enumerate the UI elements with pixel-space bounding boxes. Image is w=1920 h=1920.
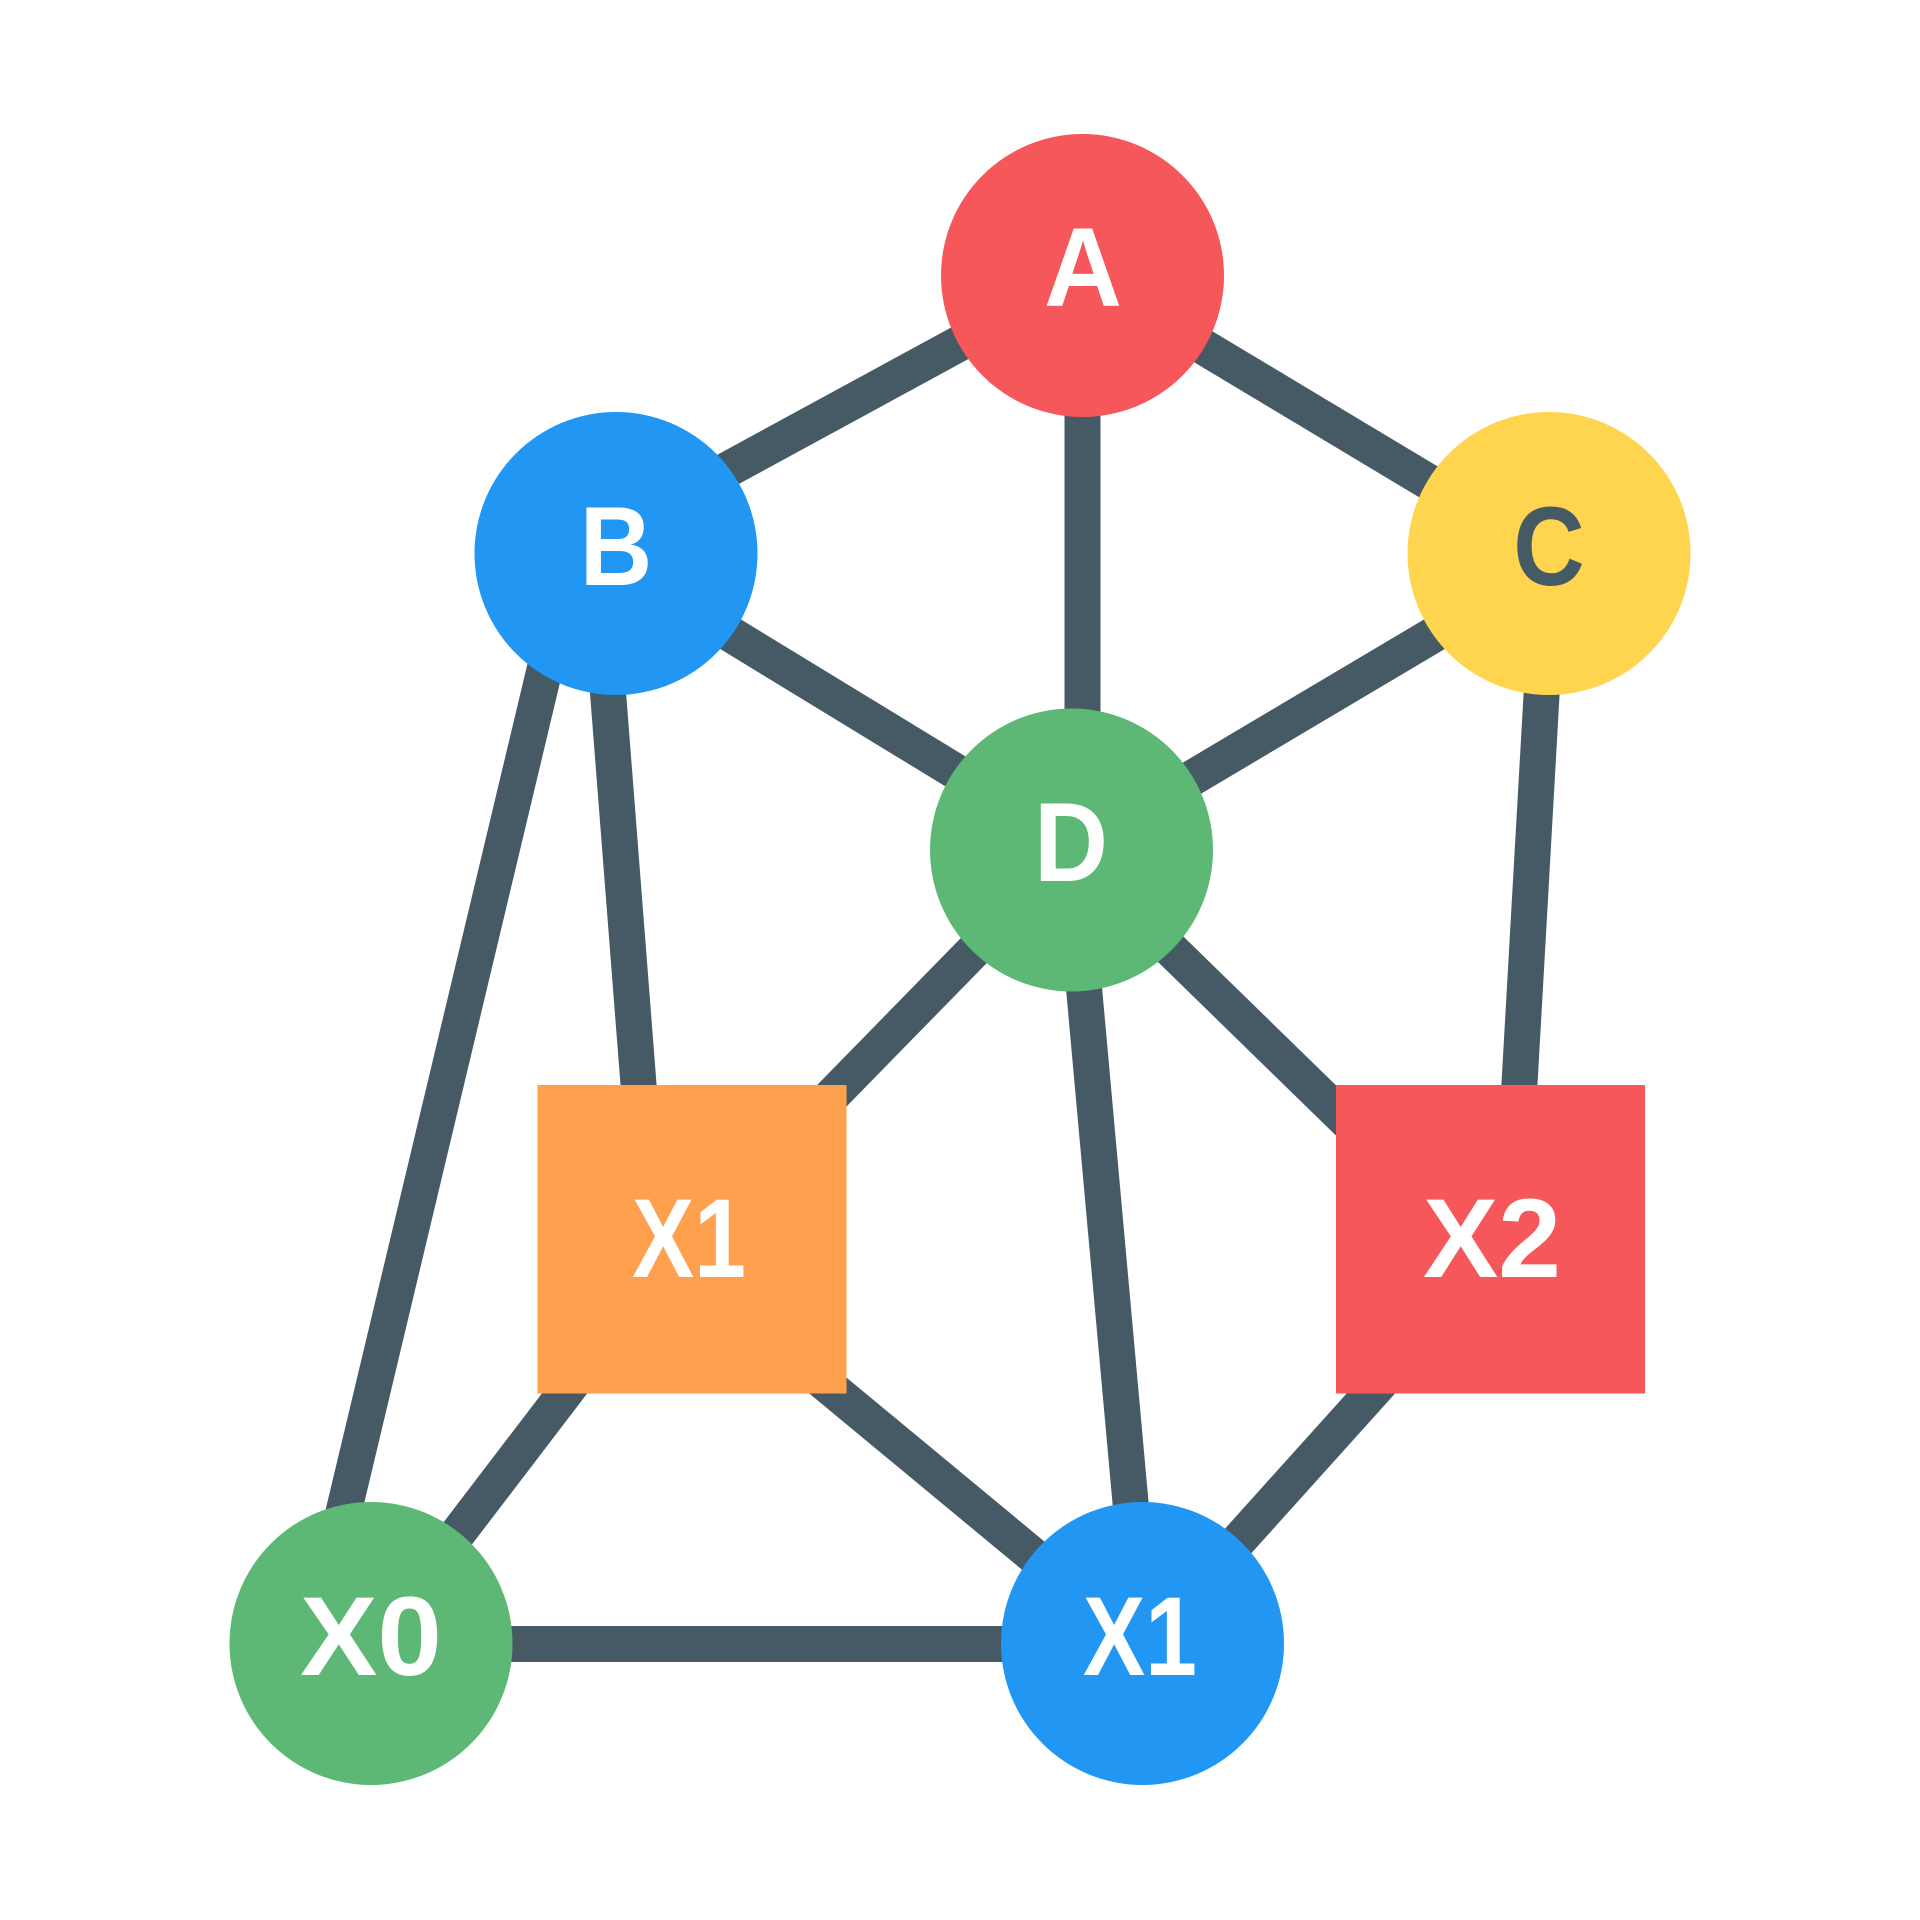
node C: C (1513, 484, 1585, 609)
node B (474, 412, 758, 695)
node D: D (1034, 780, 1108, 905)
node X1 circle: X1 (1083, 1574, 1197, 1699)
node D (930, 708, 1213, 992)
node X0 (230, 1502, 512, 1785)
square node X2 (1336, 1085, 1645, 1394)
node B: B (580, 484, 652, 609)
node X0: X0 (300, 1574, 442, 1699)
node C (1408, 412, 1690, 695)
square node X1 (538, 1085, 846, 1394)
square node X2: X2 (1423, 1176, 1561, 1301)
node A: A (1044, 205, 1122, 330)
connecting edges (340, 329, 1543, 1644)
square node X1: X1 (632, 1176, 746, 1301)
node X1 circle (1001, 1502, 1284, 1785)
node A (941, 134, 1224, 417)
